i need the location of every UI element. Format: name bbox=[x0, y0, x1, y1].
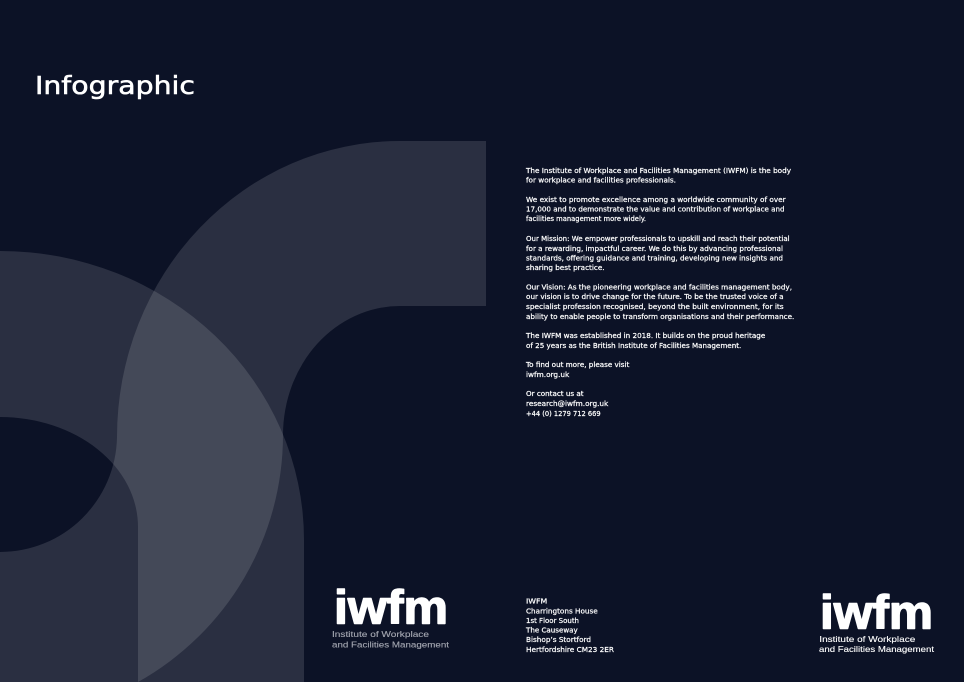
paragraph: history: of 25 years as the British Institute of Facilities Management. bbox=[526, 342, 741, 350]
paragraph: website: To find out more, please visit bbox=[525, 361, 630, 369]
paragraph: purpose: We exist to promote excellence among a worldwide community of over bbox=[526, 196, 786, 204]
curved band from top right bbox=[0, 141, 486, 682]
logo: IWFM centre: and Facilities Management bbox=[332, 640, 450, 650]
text block: postal address: Hertfordshire CM23 2ER bbox=[526, 646, 614, 654]
text block: postal address: The Causeway bbox=[525, 627, 578, 635]
text block: postal address: 1st Floor South bbox=[526, 617, 579, 625]
paragraph: contact details bbox=[526, 390, 609, 418]
paragraph: mission: for a rewarding, impactful career. We do this by advancing professional bbox=[526, 245, 783, 253]
paragraph: introduction bbox=[525, 167, 791, 185]
logo: IWFM right: iwfm bbox=[820, 586, 933, 638]
paragraph: introduction: The Institute of Workplace and Facilities Management (IWFM) is the body bbox=[525, 167, 791, 175]
paragraph: vision bbox=[526, 283, 794, 321]
text block: postal address: Charringtons House bbox=[526, 607, 598, 615]
text block: postal address bbox=[525, 598, 614, 654]
paragraph: vision: our vision is to drive change for the future. To be the trusted voice of a bbox=[526, 293, 784, 301]
paragraph: mission bbox=[526, 235, 790, 272]
text block: postal address: IWFM bbox=[526, 598, 548, 606]
paragraph: contact details: Or contact us at bbox=[526, 390, 584, 398]
logo: IWFM centre: Institute of Workplace bbox=[332, 629, 429, 639]
paragraph: vision: Our Vision: As the pioneering workplace and facilities management body, bbox=[526, 283, 792, 291]
paragraph: vision: specialist profession recognised, beyond the built environment, for its bbox=[526, 303, 784, 311]
paragraph: history bbox=[525, 332, 765, 350]
paragraph: website bbox=[525, 361, 630, 379]
text block: about IWFM bbox=[525, 167, 794, 418]
paragraph: contact details: research@iwfm.org.uk bbox=[526, 400, 609, 408]
title: Infographic bbox=[35, 71, 195, 100]
paragraph: mission: Our Mission: We empower professionals to upskill and reach their potential bbox=[526, 235, 790, 243]
background graphic: overlapping curved bands bbox=[0, 141, 486, 682]
paragraph: introduction: for workplace and facilities professionals. bbox=[526, 177, 676, 185]
paragraph: website: iwfm.org.uk bbox=[526, 371, 569, 379]
logo: IWFM centre: iwfm bbox=[334, 580, 448, 634]
curved band from left to bottom bbox=[0, 251, 304, 682]
logo: IWFM right: and Facilities Management bbox=[819, 644, 935, 654]
paragraph: purpose: facilities management more widely. bbox=[526, 215, 646, 223]
logo: IWFM right: Institute of Workplace bbox=[819, 634, 916, 644]
paragraph: mission: standards, offering guidance and training, developing new insights and bbox=[526, 255, 783, 263]
paragraph: purpose: 17,000 and to demonstrate the value and contribution of workplace and bbox=[526, 206, 785, 214]
paragraph: history: The IWFM was established in 2018. It builds on the proud heritage bbox=[525, 332, 765, 340]
paragraph: mission: sharing best practice. bbox=[526, 264, 605, 272]
text block: postal address: Bishop’s Stortford bbox=[526, 636, 591, 644]
logo: IWFM centre bbox=[332, 580, 450, 650]
paragraph: purpose bbox=[526, 196, 786, 223]
paragraph: contact details: +44 (0) 1279 712 669 bbox=[526, 410, 601, 418]
paragraph: vision: ability to enable people to transform organisations and their performance. bbox=[526, 313, 794, 321]
